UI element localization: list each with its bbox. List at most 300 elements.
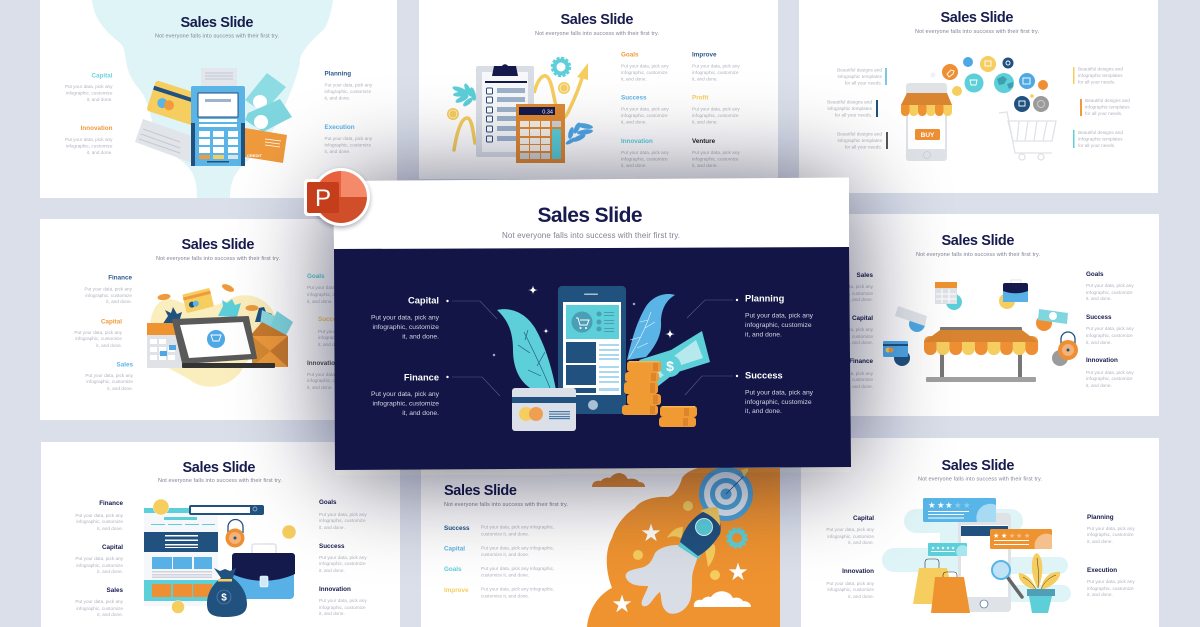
text block: planning: infographic, customize: [745, 322, 812, 329]
text block: innovation: [65, 125, 113, 155]
text block: finance: infographic, customize: [76, 519, 123, 524]
text block: right 3: [1073, 130, 1123, 148]
icon: rocket: [667, 507, 721, 567]
text block: sales: [85, 362, 134, 391]
icon: PowerPoint badge: P: [315, 185, 331, 212]
heading: Sales Slide: [538, 204, 642, 227]
leader line: planning: [687, 299, 738, 318]
text block: innovation: infographic, customize: [319, 605, 366, 610]
text block: success: [1086, 314, 1134, 345]
text block: innovation: Put your data, pick any: [65, 137, 113, 142]
text block: execution: Put your data, pick any: [1087, 579, 1135, 584]
text block: sales: [825, 272, 874, 302]
subtitle: Not everyone falls into success with their first try.: [535, 31, 659, 37]
text block: success: [621, 94, 669, 124]
text block: success: Success: [318, 316, 344, 323]
text block: goals: Put your data, pick any: [621, 64, 669, 68]
text block: execution: it, and done.: [324, 149, 350, 154]
review card: orange: ★★★: [1009, 532, 1030, 540]
text block: goals: Goals: [1086, 271, 1104, 278]
text block: finance: Put your data, pick any: [825, 371, 874, 376]
text block: success: infographic, customize: [318, 335, 365, 340]
text block: planning: it, and done.: [1087, 539, 1113, 544]
text block: goals: infographic, customize: [307, 292, 354, 297]
text block: success: infographic, customize: [319, 561, 366, 566]
text block: innovation: Innovation: [842, 568, 874, 575]
icon: payment terminal with cards and notes: [135, 68, 292, 166]
text row: improve: [444, 586, 554, 598]
subtitle: Not everyone falls into success with their first try.: [916, 252, 1040, 258]
text block: left 2: Beautiful designs and: [827, 100, 872, 104]
text block: finance: it, and done.: [847, 384, 873, 389]
text block: goals: Put your data, pick any: [319, 512, 367, 517]
illustration: orange cloud background: [587, 468, 780, 627]
text block: finance: [75, 500, 124, 531]
text block: left 1: Beautiful designs and: [837, 68, 882, 72]
text block: innovation: it, and done.: [848, 594, 874, 599]
text block: innovation: Put your data, pick any: [826, 581, 875, 586]
text block: execution: Put your data, pick any: [324, 136, 373, 141]
text block: success: [319, 543, 367, 573]
icon: padlock: [226, 520, 244, 548]
icon: banknote: [639, 331, 710, 387]
text block: improve: Put your data, pick any: [692, 64, 740, 68]
text block: profit: [692, 94, 740, 124]
text block: capital: infographic, customize: [372, 324, 439, 331]
text block: innovation: infographic, customize: [621, 156, 668, 162]
text block: finance: Finance: [849, 358, 873, 365]
text block: success: it, and done.: [318, 342, 344, 347]
text row: capital: Capital: [444, 546, 465, 552]
icon: stars: ★: [727, 559, 749, 586]
text block: venture: [692, 138, 740, 168]
main slide shadow: [334, 182, 851, 476]
heading: Sales Slide: [182, 460, 256, 476]
text block: capital: Put your data, pick any: [826, 527, 875, 532]
text row: goals: Goals: [444, 566, 462, 573]
text row: success: [444, 524, 554, 536]
text block: capital: Capital: [853, 515, 874, 522]
text block: success: Put your data, pick any: [745, 390, 814, 396]
text block: right 1: for all your needs.: [1078, 80, 1115, 84]
text block: innovation: Put your data, pick any: [307, 372, 355, 377]
text block: innovation: Innovation: [81, 125, 113, 132]
text block: execution: it, and done.: [1087, 592, 1113, 597]
text block: sales: it, and done.: [847, 297, 873, 302]
text block: success: Put your data, pick any: [1086, 326, 1134, 331]
text block: success: [318, 316, 366, 347]
icon: small cloud: [592, 473, 645, 487]
text block: goals: Goals: [621, 52, 639, 58]
review card: blue: [923, 498, 996, 522]
text block: goals: it, and done.: [1086, 296, 1112, 301]
panel: slide bottom right, product reviews: [801, 438, 1159, 627]
text block: improve: [692, 52, 740, 82]
text block: capital: [65, 72, 113, 102]
text block: right 2: infographic templates: [1085, 104, 1130, 110]
icon: stars: [611, 520, 749, 618]
text block: innovation: infographic, customize: [66, 144, 113, 148]
text block: innovation: Innovation: [319, 586, 351, 593]
text block: success: [745, 370, 814, 415]
subtitle: Not everyone falls into success with their first try.: [155, 34, 279, 40]
text block: success: it, and done.: [319, 568, 345, 573]
heading: Sales Slide: [560, 12, 634, 28]
text block: goals: [319, 499, 367, 530]
text block: success: infographic, customize: [621, 113, 668, 118]
text block: success: it, and done.: [621, 120, 647, 124]
text block: left 2: [827, 100, 878, 118]
icon: plant: [1019, 553, 1060, 613]
text block: sales: Sales: [117, 362, 133, 368]
text block: goals: it, and done.: [621, 76, 647, 82]
text block: innovation: it, and done.: [87, 150, 112, 155]
text block: execution: Execution: [1087, 567, 1117, 574]
text block: goals: [621, 52, 669, 82]
text block: capital: it, and done.: [87, 97, 112, 102]
panel: slide top right, online store: [799, 0, 1158, 193]
text block: success: infographic, customize: [1086, 333, 1133, 338]
subtitle: Not everyone falls into success with their first try.: [158, 478, 282, 484]
text block: right 1: infographic templates: [1078, 73, 1123, 78]
icon: phone: [558, 286, 626, 414]
text block: finance: infographic, customize: [372, 400, 439, 408]
text block: goals: infographic, customize: [621, 70, 668, 75]
text block: sales: Put your data, pick any: [825, 284, 874, 289]
text block: planning: Put your data, pick any: [324, 82, 373, 88]
text block: capital: Put your data, pick any: [371, 314, 440, 322]
text block: capital: Capital: [102, 544, 123, 551]
text block: left 3: infographic templates: [837, 138, 883, 143]
text block: capital: it, and done.: [848, 540, 874, 545]
text block: left 3: Beautiful designs and: [837, 132, 882, 136]
text block: finance: infographic, customize: [85, 293, 132, 298]
text block: sales: it, and done.: [97, 612, 123, 617]
text row: capital: Put your data, pick any infographic,: [481, 546, 554, 550]
icon: coin stacks: [622, 361, 697, 427]
text block: sales: [75, 587, 124, 617]
text block: right 2: [1080, 98, 1130, 116]
text block: execution: [324, 124, 373, 154]
text block: goals: Put your data, pick any: [307, 285, 355, 290]
text row: goals: [444, 566, 554, 578]
text block: success: infographic, customize: [745, 399, 812, 406]
text block: planning: infographic, customize: [324, 89, 372, 94]
text block: sales: Put your data, pick any: [75, 599, 124, 604]
review card: blue: ★★★: [928, 500, 953, 510]
review card: orange: [990, 529, 1052, 549]
text block: innovation: it, and done.: [319, 611, 345, 616]
text block: sales: infographic, customize: [76, 606, 123, 611]
text block: finance: Finance: [99, 500, 123, 507]
subtitle: Not everyone falls into success with their first try.: [915, 29, 1039, 35]
icon: magnifier: [992, 561, 1022, 597]
text block: planning: Put your data, pick any: [1087, 526, 1135, 531]
text block: innovation: Put your data, pick any: [621, 150, 669, 155]
icon: calendar: [935, 282, 962, 310]
text block: venture: Venture: [692, 138, 716, 145]
text block: left 2: infographic templates: [827, 106, 873, 111]
text block: capital: Put your data, pick any: [75, 556, 124, 561]
icon: credit card: [883, 341, 910, 366]
icon: stars: ★: [640, 520, 662, 547]
text block: capital: it, and done.: [97, 569, 123, 574]
heading: Sales Slide: [942, 458, 1014, 474]
text block: execution: [1087, 567, 1135, 597]
icon: padlock: [1052, 332, 1078, 366]
text block: finance: Put your data, pick any: [84, 286, 133, 292]
text row: success: customize it, and done.: [481, 532, 529, 536]
text row: goals: customize it, and done.: [481, 572, 529, 578]
icon: shopping cart: [999, 112, 1056, 160]
panel: main slide: [333, 178, 851, 470]
text block: goals: [1086, 271, 1134, 301]
panel: slide middle right, market stall: [825, 214, 1159, 416]
heading: Sales Slide: [942, 233, 1014, 249]
text block: goals: infographic, customize: [319, 518, 366, 523]
subtitle: Not everyone falls into success with their first try.: [502, 231, 680, 240]
text block: capital: it, and done.: [96, 343, 122, 348]
text block: goals: infographic, customize: [1086, 290, 1133, 295]
text block: finance: it, and done.: [97, 526, 123, 531]
leader line: success: [685, 375, 738, 395]
text block: innovation: Innovation: [307, 360, 339, 367]
icon: money bag: $: [221, 592, 227, 604]
text block: success: Put your data, pick any: [621, 106, 669, 112]
text row: success: Put your data, pick any infographic,: [481, 524, 554, 530]
text block: capital: Capital: [408, 296, 439, 306]
text block: right 3: for all your needs.: [1078, 143, 1115, 148]
text row: capital: customize it, and done.: [481, 552, 529, 557]
text block: capital: infographic, customize: [76, 563, 123, 568]
text block: profit: infographic, customize: [692, 113, 739, 118]
text block: success: it, and done.: [1086, 340, 1112, 345]
text block: capital: Capital: [92, 72, 113, 80]
icon: cheque: [895, 306, 927, 332]
icon: smoke trail: [626, 545, 698, 614]
text block: innovation: infographic, customize: [827, 587, 874, 592]
text block: innovation: Put your data, pick any: [319, 598, 367, 603]
text block: innovation: [621, 138, 669, 168]
text block: finance: Finance: [404, 372, 439, 382]
text block: innovation: [307, 360, 355, 390]
icon: target: [699, 467, 753, 521]
icon: white cloud: [694, 591, 751, 607]
subtitle: Not everyone falls into success with their first try.: [444, 502, 568, 508]
text block: success: Put your data, pick any: [318, 329, 366, 334]
panel: slide top middle, clipboard and calculator: [419, 0, 778, 179]
text block: improve: it, and done.: [692, 76, 718, 82]
text block: finance: Finance: [108, 274, 132, 282]
text block: venture: Put your data, pick any: [692, 150, 740, 155]
text block: right 1: Beautiful designs and: [1078, 66, 1123, 72]
text row: improve: Put your data, pick any infographic,: [481, 586, 554, 592]
text block: planning: it, and done.: [745, 332, 782, 338]
text block: success: Put your data, pick any: [319, 555, 367, 560]
icon: phone storefront: [901, 83, 952, 161]
text block: sales: infographic, customize: [86, 379, 133, 384]
text block: planning: Planning: [1087, 514, 1114, 521]
panel: slide top left, payment terminal: [40, 0, 397, 198]
text block: right 3: Beautiful designs and: [1078, 130, 1123, 135]
text block: finance: [371, 372, 440, 417]
text block: capital: infographic, customize: [75, 336, 122, 341]
text row: improve: customize it, and done.: [481, 594, 529, 598]
text block: left 1: for all your needs.: [845, 80, 882, 86]
icon: PowerPoint badge: [304, 168, 370, 228]
text block: sales: it, and done.: [107, 386, 133, 391]
text block: left 1: [837, 68, 887, 86]
text block: profit: Profit: [692, 94, 709, 102]
text block: finance: it, and done.: [106, 299, 132, 304]
text block: finance: it, and done.: [402, 410, 439, 417]
review card: blue: ★★: [954, 500, 971, 510]
text block: success: Success: [1086, 314, 1112, 321]
text block: finance: [825, 358, 874, 389]
text block: right 1: [1073, 66, 1123, 84]
icon: payment terminal with cards and notes: CREDIT: [247, 153, 262, 158]
text block: planning: infographic, customize: [1087, 532, 1134, 537]
text block: execution: Execution: [324, 124, 355, 131]
text block: success: Success: [319, 543, 345, 550]
text block: right 2: Beautiful designs and: [1085, 98, 1130, 103]
text block: execution: infographic, customize: [1087, 586, 1134, 591]
text block: goals: it, and done.: [319, 525, 345, 530]
text block: capital: Put your data, pick any: [74, 330, 123, 335]
text block: sales: Sales: [107, 587, 123, 594]
icon: credit card: [512, 388, 576, 431]
subtitle: Not everyone falls into success with their first try.: [918, 476, 1042, 482]
text block: capital: infographic, customize: [826, 334, 873, 339]
text block: innovation: it, and done.: [1086, 383, 1112, 388]
review card: teal: [928, 543, 967, 556]
text block: success: Success: [621, 94, 647, 102]
text block: planning: [745, 294, 814, 338]
icon: briefcase: [232, 544, 295, 599]
text block: finance: Put your data, pick any: [75, 513, 124, 518]
icon: shopping bags: [913, 559, 970, 613]
text block: innovation: [826, 568, 875, 599]
text block: goals: it, and done.: [307, 299, 333, 304]
text block: capital: infographic, customize: [827, 534, 874, 539]
text block: capital: it, and done.: [402, 334, 439, 340]
text block: improve: infographic, customize: [692, 70, 739, 75]
icon: web page with search bar: [144, 505, 264, 606]
text block: capital: [75, 544, 124, 574]
text block: success: Success: [745, 370, 783, 380]
heading: Sales Slide: [444, 483, 517, 499]
text block: profit: it, and done.: [692, 120, 718, 124]
text block: execution: infographic, customize: [324, 142, 372, 148]
text block: left 3: for all your needs.: [845, 144, 882, 150]
text block: planning: it, and done.: [324, 96, 350, 100]
text block: venture: infographic, customize: [692, 156, 739, 162]
text block: left 3: [837, 132, 888, 150]
icon: briefcase: [999, 280, 1028, 309]
icon: stars: ★: [611, 591, 633, 618]
heading: Sales Slide: [180, 15, 254, 31]
text block: goals: Goals: [319, 499, 337, 506]
text block: sales: infographic, customize: [826, 291, 873, 296]
text block: left 1: infographic templates: [837, 74, 883, 79]
text block: innovation: [1086, 357, 1134, 388]
review card: teal: ★★★★★: [931, 546, 956, 550]
text block: goals: Goals: [307, 273, 325, 280]
text block: capital: it, and done.: [847, 340, 873, 345]
panel: slide middle left, laptop: [40, 219, 366, 420]
illustration: reviews on a phone: [882, 498, 1071, 613]
text row: success: Success: [444, 525, 470, 532]
text block: capital: [826, 515, 875, 545]
text block: improve: Improve: [692, 52, 717, 58]
text row: improve: Improve: [444, 587, 469, 594]
text block: capital: [74, 318, 123, 348]
icon: market stall: [924, 327, 1038, 382]
text block: planning: Put your data, pick any: [745, 312, 814, 320]
text block: capital: infographic, customize: [66, 90, 113, 96]
text block: finance: [84, 274, 133, 304]
text row: capital: [444, 546, 554, 557]
text block: capital: Put your data, pick any: [825, 327, 874, 332]
icon: banknote: [1036, 309, 1068, 331]
text block: left 2: for all your needs.: [835, 112, 872, 118]
text block: capital: [825, 315, 874, 345]
text row: goals: Put your data, pick any infographic,: [481, 566, 554, 571]
icon: clipboard, calculator and growth arrow: [447, 58, 593, 163]
text block: innovation: it, and done.: [621, 163, 647, 168]
text block: innovation: infographic, customize: [1086, 376, 1133, 381]
icon: clipboard, calculator and growth arrow: 0.34: [542, 110, 553, 116]
icon: phone storefront: BUY: [921, 132, 935, 139]
text block: innovation: Innovation: [1086, 357, 1118, 364]
icon: coins: [633, 501, 720, 580]
text block: planning: Planning: [324, 70, 351, 78]
icon: gear: [728, 528, 746, 548]
text block: innovation: Put your data, pick any: [1086, 370, 1134, 375]
icon: coins: [153, 499, 296, 614]
panel: slide bottom middle, rocket launch: [421, 467, 780, 627]
icon: sparkles: [492, 285, 675, 357]
subtitle: Not everyone falls into success with their first try.: [156, 256, 280, 262]
icon: floating bubbles: [930, 56, 1049, 112]
text block: profit: Put your data, pick any: [692, 106, 740, 112]
text block: right 2: for all your needs.: [1085, 111, 1122, 116]
text block: innovation: [319, 586, 367, 616]
text block: sales: Put your data, pick any: [85, 373, 134, 378]
leader line: capital: [446, 300, 497, 319]
text block: planning: [324, 70, 373, 100]
text block: finance: infographic, customize: [826, 377, 873, 382]
icon: laptop, calendar and envelope: [147, 283, 293, 387]
text block: planning: [1087, 514, 1135, 544]
text block: sales: Sales: [857, 272, 873, 279]
heading: Sales Slide: [940, 10, 1014, 26]
text block: finance: Put your data, pick any: [371, 391, 440, 398]
text block: right 3: infographic templates: [1078, 136, 1123, 142]
icon: blue leaf: [627, 294, 675, 360]
heading: Sales Slide: [182, 237, 254, 253]
icon: teal leaf: [497, 309, 556, 390]
icon: money bag: [207, 568, 247, 617]
text block: venture: it, and done.: [692, 163, 718, 168]
text block: capital: [371, 296, 440, 340]
text block: capital: Capital: [101, 318, 122, 326]
text block: innovation: infographic, customize: [307, 378, 354, 383]
panel: slide bottom left, briefcase and web page: [41, 442, 400, 627]
text block: innovation: it, and done.: [307, 385, 333, 390]
leader line: finance: [446, 376, 500, 396]
text block: planning: Planning: [745, 294, 785, 304]
